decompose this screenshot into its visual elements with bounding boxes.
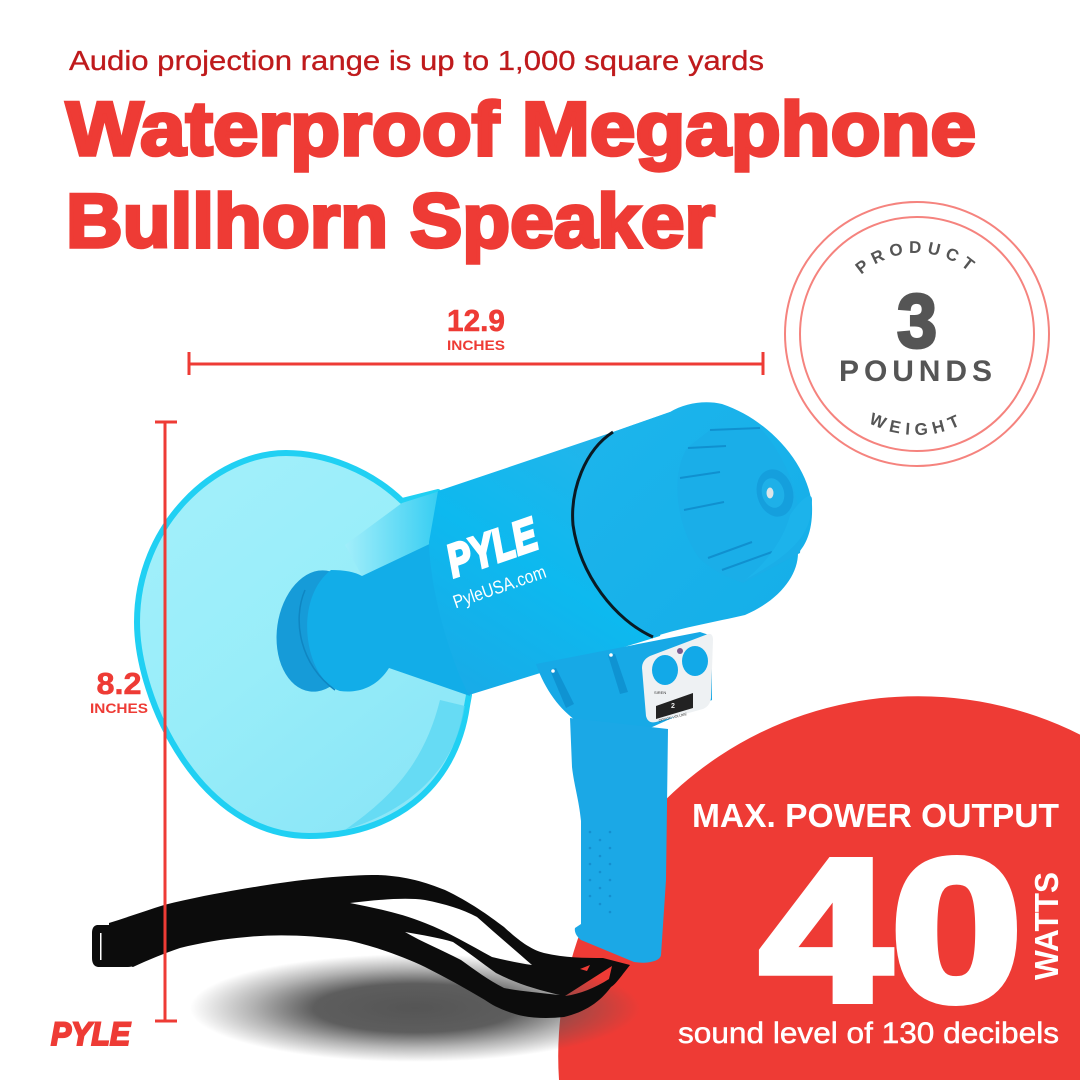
vertical dimension: 8.2 [96, 666, 142, 701]
control panel: OFF/ON VOLUME [658, 712, 688, 723]
horizontal dimension: 12.9 [447, 303, 505, 338]
grip handle [570, 718, 668, 963]
brand on body [432, 507, 552, 612]
vertical dimension [90, 421, 177, 1021]
horizontal dimension [189, 303, 763, 375]
bell cone highlight [345, 491, 440, 576]
strap buckle [92, 925, 135, 967]
brand on body: PYLE [440, 507, 545, 587]
end cap vent [751, 465, 799, 521]
drop shadow under megaphone [190, 954, 640, 1062]
badge: product weight [784, 201, 1050, 467]
control panel [642, 634, 713, 723]
wrist strap [92, 875, 630, 1018]
subheading: Audio projection range is up to 1,000 square yards [69, 45, 764, 76]
neck edge line [299, 590, 335, 690]
vertical dimension: INCHES [90, 700, 148, 716]
badge: product weight: WEIGHT [871, 412, 957, 436]
brand logo: PYLE [51, 1016, 132, 1052]
title: Bullhorn Speaker [66, 179, 715, 264]
neck and body tube [307, 540, 470, 696]
badge: product weight: PRODUCT [854, 241, 976, 274]
black seam [573, 432, 653, 637]
power value: 40 [760, 817, 1022, 1043]
megaphone illustration [137, 402, 812, 963]
bell lower lobe shading [345, 700, 465, 830]
title: Waterproof Megaphone [66, 87, 976, 172]
megaphone body [429, 412, 700, 695]
horizontal dimension: INCHES [447, 337, 505, 353]
badge: product weight: 3 [897, 279, 937, 364]
power output text: MAX. POWER OUTPUT [692, 797, 1059, 834]
panel: red power circle [558, 696, 1080, 1080]
handle mount [536, 632, 712, 728]
mount vents [550, 653, 628, 708]
grip dots [589, 831, 611, 913]
watts label: WATTS [1028, 872, 1065, 980]
brand on body: PyleUSA.com [450, 561, 549, 612]
decibel text: sound level of 130 decibels [678, 1017, 1059, 1050]
knob with ridges [677, 428, 812, 583]
neck ring [269, 565, 367, 697]
power output text [678, 797, 1065, 1050]
badge: product weight: POUNDS [839, 355, 992, 388]
rear cap [573, 402, 812, 637]
control panel: 2 [671, 703, 675, 710]
title [66, 87, 976, 264]
megaphone bell [137, 453, 469, 836]
control panel: SIREN [654, 690, 666, 695]
